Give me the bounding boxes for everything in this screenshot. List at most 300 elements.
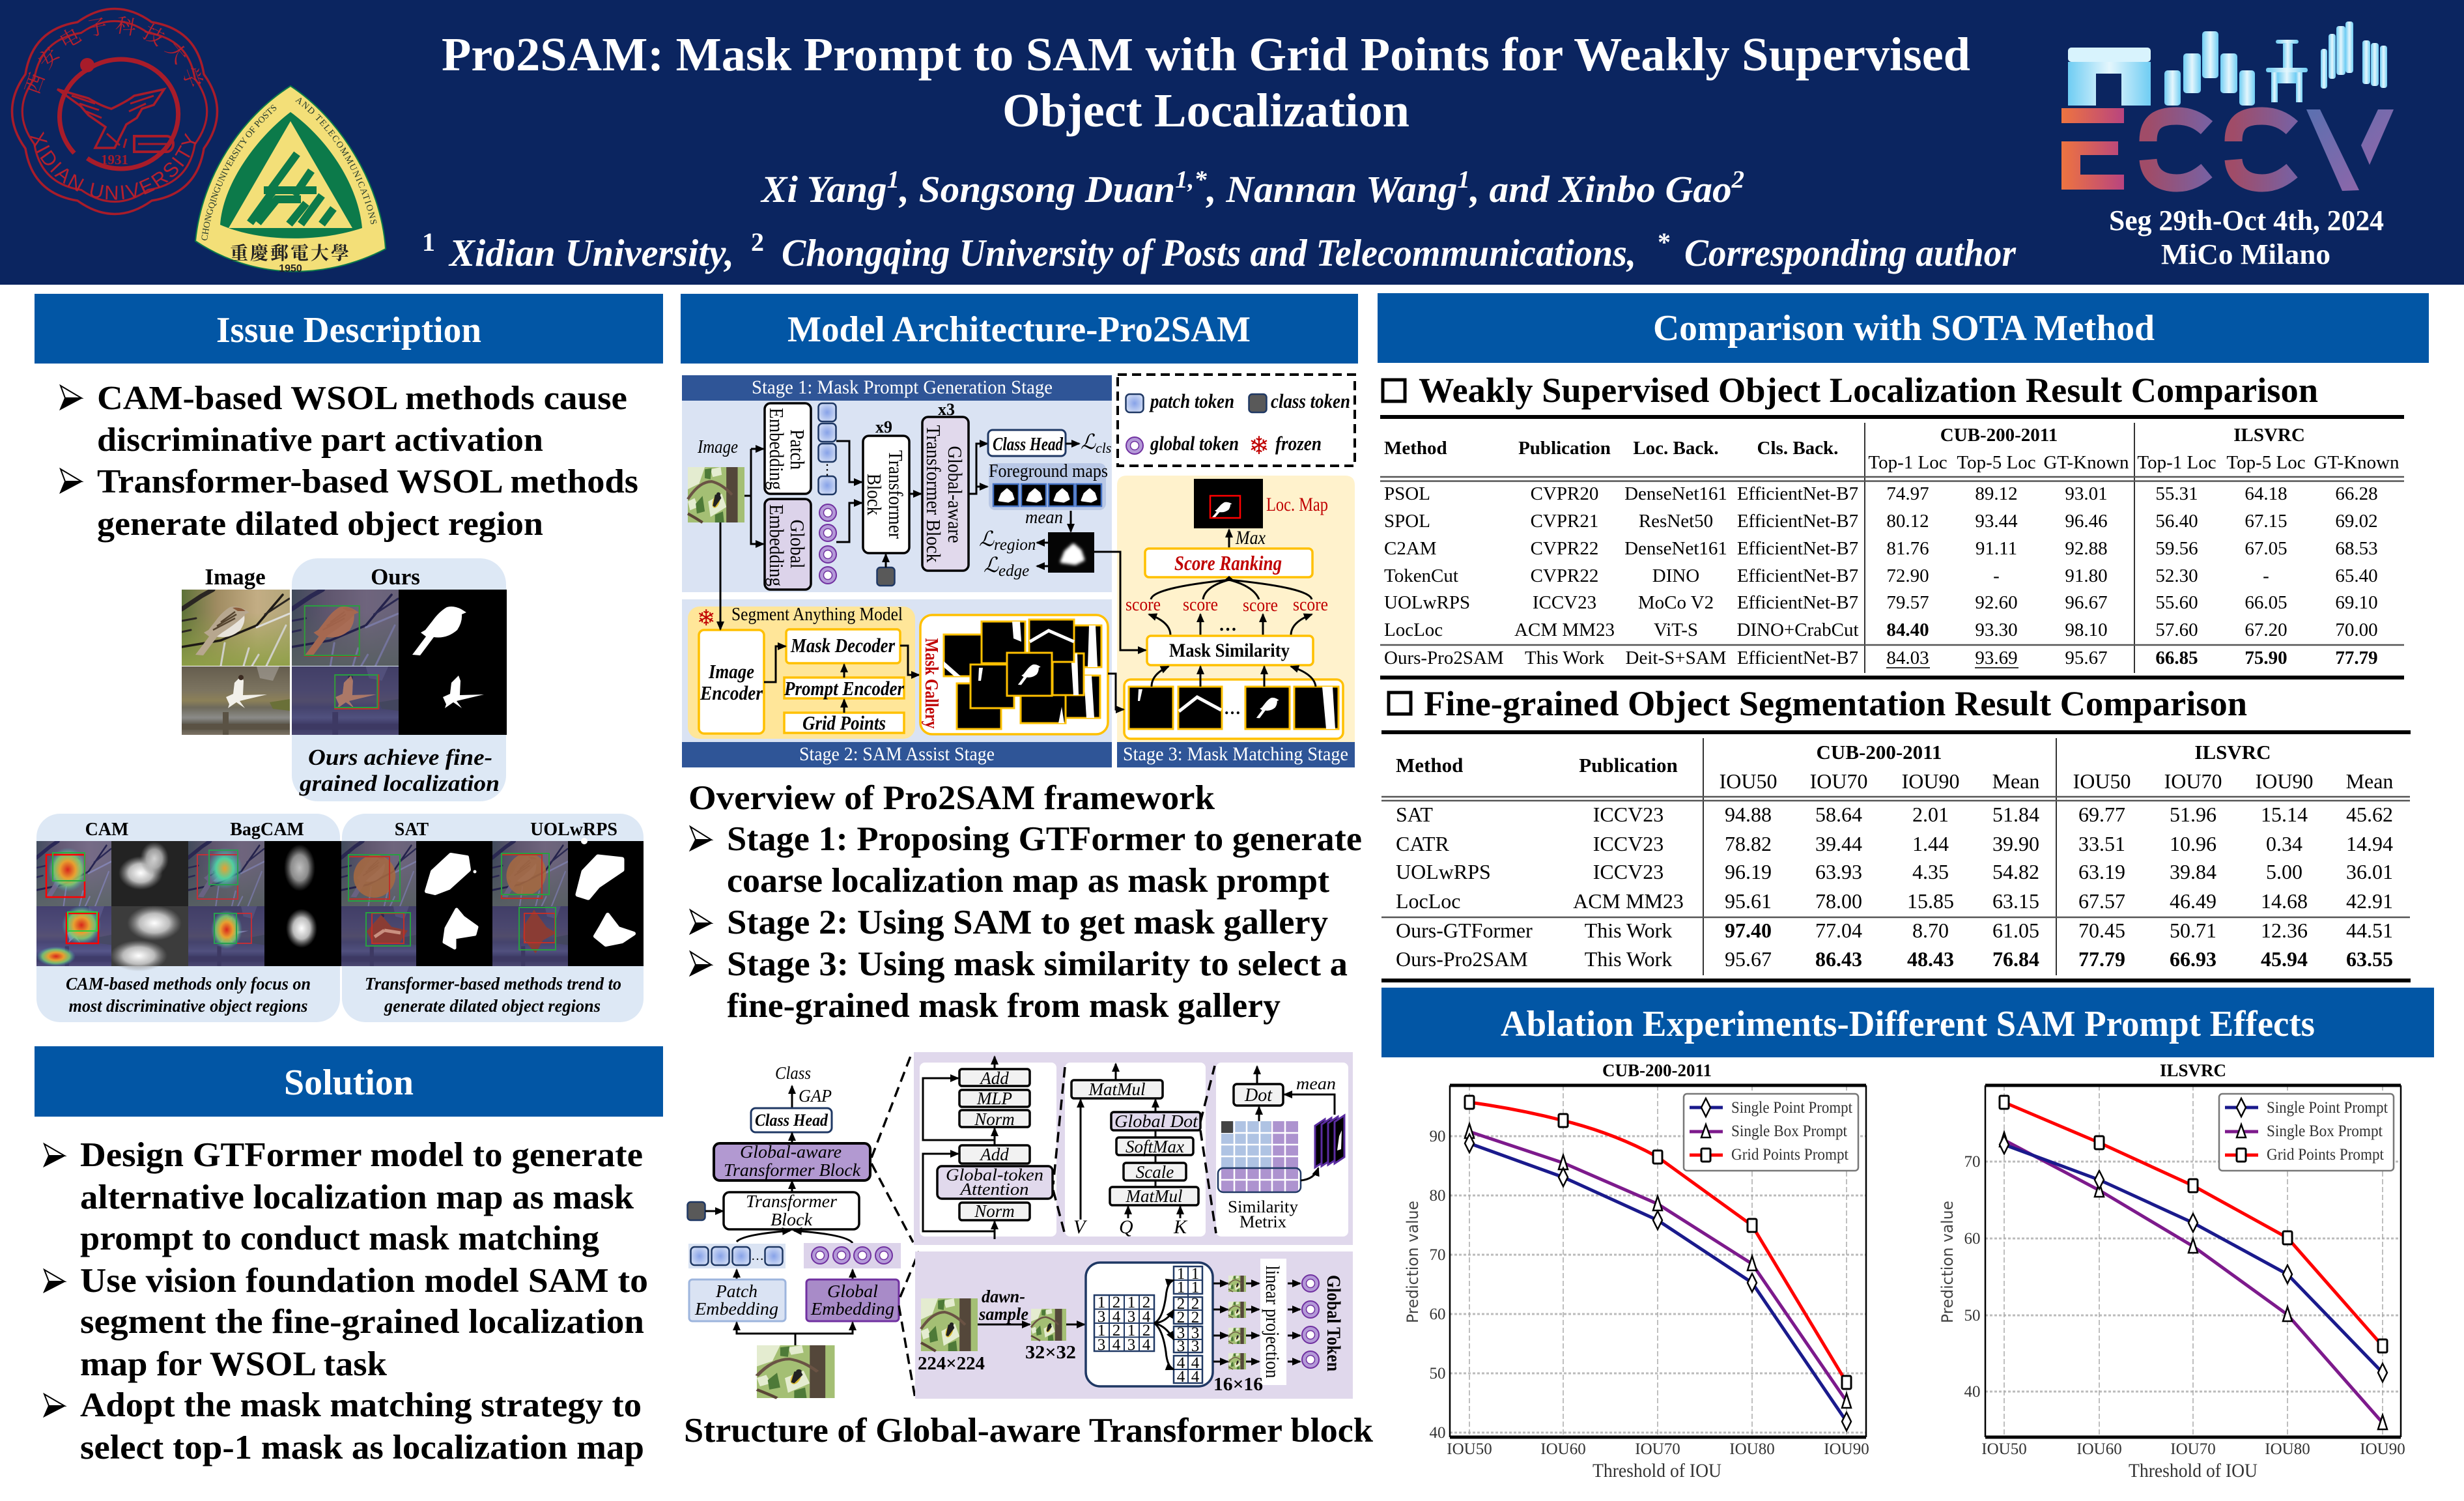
table: segmentation results: 86.43 bbox=[1815, 947, 1862, 971]
table: WSOL results: 66.05 bbox=[2245, 592, 2287, 613]
table: WSOL results: DINO bbox=[1652, 565, 1699, 586]
heading: issue description bbox=[35, 294, 663, 364]
table: WSOL results: 65.40 bbox=[2335, 565, 2378, 586]
table: WSOL results: CVPR21 bbox=[1531, 511, 1598, 532]
grid: 4×4 patches: 1 bbox=[1127, 1294, 1135, 1311]
chart legend: Single Point Prompt bbox=[1731, 1099, 1852, 1117]
chart: ILSVRC: IOU90 bbox=[2360, 1440, 2405, 1458]
diagram: stage 1 mask prompt generation: x3 bbox=[938, 400, 955, 419]
diagram: stage 1 mask prompt generation: Foreground maps bbox=[989, 461, 1108, 481]
figure: SAT and UOLwRPS comparison: generate dilated object regions bbox=[384, 996, 601, 1016]
table: WSOL results: 91.11 bbox=[1975, 538, 2017, 559]
table: segmentation results: 44.51 bbox=[2346, 919, 2393, 942]
figure: image vs ours: Image bbox=[205, 564, 266, 590]
table: segmentation results: IOU90 bbox=[1902, 769, 1959, 793]
bullet list: overview: Stage 2: Using SAM to get mask gallery bbox=[727, 904, 1328, 941]
table: WSOL results: 67.20 bbox=[2245, 620, 2287, 640]
table: segmentation results: SAT bbox=[1396, 803, 1433, 826]
block: transformer sub-layers bbox=[923, 1057, 1053, 1239]
heading: solution bbox=[35, 1046, 663, 1117]
title: Object Localization bbox=[1002, 84, 1409, 137]
chart: CUB-200-2011: Prediction value bbox=[1404, 1201, 1422, 1323]
table: segmentation results: ACM MM23 bbox=[1573, 889, 1684, 913]
grids: grouped 2×2 patches: 1 bbox=[1191, 1279, 1199, 1296]
table: segmentation results: 54.82 bbox=[1992, 860, 2039, 883]
table: segmentation results: 14.68 bbox=[2261, 889, 2308, 913]
diagram: GTFormer overview stack: Block bbox=[771, 1210, 813, 1229]
table: segmentation results: 94.88 bbox=[1725, 803, 1772, 826]
diagram: GTFormer overview stack: … bbox=[751, 1249, 764, 1263]
table: WSOL results: MoCo V2 bbox=[1638, 592, 1714, 613]
diagram: GTFormer overview stack: Patch bbox=[715, 1281, 758, 1301]
legend: token types: frozen bbox=[1275, 432, 1322, 455]
table: segmentation results: UOLwRPS bbox=[1396, 860, 1491, 883]
diagram: stage 1 mask prompt generation: Class Head bbox=[993, 435, 1064, 455]
diagram: stage 1 mask prompt generation: ℒ bbox=[1081, 430, 1096, 453]
diagram: GTFormer overview stack: Global bbox=[827, 1281, 878, 1301]
figure: SAT and UOLwRPS comparison: SAT bbox=[395, 820, 429, 840]
diagram: stage 1 mask prompt generation: Global-aware bbox=[944, 446, 967, 543]
table: WSOL results: CVPR20 bbox=[1531, 483, 1598, 504]
table: WSOL results: ILSVRC bbox=[2233, 425, 2305, 446]
table: WSOL results: 93.01 bbox=[2065, 483, 2108, 504]
bullet list: overview bbox=[690, 820, 1362, 1025]
diagram: stage 2 SAM assist: Image bbox=[708, 660, 754, 683]
table: WSOL results: - bbox=[1993, 565, 2000, 586]
table: WSOL results: 84.40 bbox=[1886, 620, 1929, 640]
table: WSOL results: 70.00 bbox=[2335, 620, 2378, 640]
table: segmentation results: 51.96 bbox=[2170, 803, 2216, 826]
table: WSOL results: 67.15 bbox=[2245, 511, 2287, 532]
affiliations: Xidian University, bbox=[448, 231, 734, 274]
table: WSOL results: 52.30 bbox=[2155, 565, 2198, 586]
table: segmentation results: 63.15 bbox=[1992, 889, 2039, 913]
table: segmentation results: 66.93 bbox=[2170, 947, 2216, 971]
authors: 1 bbox=[887, 166, 899, 193]
chart: ILSVRC: 70 bbox=[1964, 1153, 1980, 1171]
legend: token types bbox=[1118, 375, 1355, 466]
table: segmentation results: This Work bbox=[1585, 947, 1672, 971]
diagram: stage 1 mask prompt generation: Embedding bbox=[765, 504, 788, 586]
diagram: stage 2 SAM assist: Segment Anything Model bbox=[731, 604, 903, 625]
block: similarity matrix: mean bbox=[1296, 1074, 1336, 1093]
chart legend: Single Point Prompt bbox=[2267, 1099, 2388, 1117]
table: WSOL results: TokenCut bbox=[1384, 565, 1458, 586]
chart: ILSVRC: Prediction value bbox=[1938, 1201, 1957, 1323]
table: segmentation results: 8.70 bbox=[1912, 919, 1949, 942]
diagram: global embedding detail: 224×224 bbox=[918, 1354, 985, 1374]
table: segmentation results: 50.71 bbox=[2170, 919, 2216, 942]
diagram: stage 1 mask prompt generation: Embedding bbox=[765, 408, 788, 490]
logo: Chongqing University of Posts and Telecommunications: CHONGQINGUNIVERSITY OF POSTS bbox=[202, 104, 276, 240]
table: segmentation results: Ours-Pro2SAM bbox=[1396, 947, 1528, 971]
bullet list: issues: CAM-based WSOL methods cause bbox=[97, 380, 627, 417]
table: WSOL results: 93.44 bbox=[1975, 511, 2018, 532]
table: WSOL results: LocLoc bbox=[1384, 620, 1443, 640]
diagram: stage 2 SAM assist: Grid Points bbox=[802, 711, 886, 734]
diagram: stage 1 mask prompt generation: Transformer Block bbox=[922, 425, 945, 563]
panel: comparison with SOTA bbox=[1378, 293, 2429, 982]
chart: CUB-200-2011 bbox=[1404, 1061, 1869, 1481]
table: WSOL results: 55.31 bbox=[2155, 483, 2198, 504]
table: segmentation results: 39.44 bbox=[1815, 832, 1862, 855]
block: transformer sub-layers: Attention bbox=[959, 1180, 1029, 1199]
table: WSOL results: C2AM bbox=[1384, 538, 1437, 559]
chart: ILSVRC: Threshold of IOU bbox=[2129, 1460, 2258, 1481]
table: WSOL results: 93.30 bbox=[1975, 620, 2018, 640]
bullet list: solution bbox=[44, 1136, 648, 1466]
diagram: global embedding detail: dawn- bbox=[982, 1287, 1025, 1306]
diagram: GTFormer overview stack: Transformer bbox=[746, 1192, 838, 1211]
logo: Xidian University seal: XIDIAN UNIVERSITY bbox=[30, 132, 197, 200]
grid: 4×4 patches: 4 bbox=[1112, 1336, 1121, 1354]
chart: CUB-200-2011: IOU80 bbox=[1729, 1440, 1775, 1458]
table: segmentation results: 77.79 bbox=[2078, 947, 2125, 971]
table: WSOL results: 75.90 bbox=[2245, 648, 2287, 668]
table: segmentation results: ILSVRC bbox=[2194, 741, 2271, 764]
table: segmentation results: 76.84 bbox=[1992, 947, 2039, 971]
series: single point prompt bbox=[1465, 1134, 1851, 1431]
diagram: stage 3 mask matching: score bbox=[1183, 594, 1218, 615]
logo: Xidian University seal bbox=[10, 8, 219, 215]
table: WSOL results: 91.80 bbox=[2065, 565, 2108, 586]
table: segmentation results: This Work bbox=[1585, 919, 1672, 942]
chart legend bbox=[2219, 1094, 2394, 1171]
chart: ILSVRC: IOU70 bbox=[2170, 1440, 2216, 1458]
diagram: stage 3 mask matching: Loc. Map bbox=[1266, 494, 1328, 515]
chart: CUB-200-2011: IOU50 bbox=[1447, 1440, 1492, 1458]
table: segmentation results: 45.94 bbox=[2261, 947, 2308, 971]
table: segmentation results: ICCV23 bbox=[1593, 860, 1664, 883]
legend: token types: ❄ bbox=[1249, 431, 1269, 460]
table: WSOL results: Top-1 Loc bbox=[1868, 452, 1947, 473]
diagram: stage 3 mask matching: score bbox=[1243, 595, 1278, 616]
authors: , Songsong Duan bbox=[898, 168, 1175, 210]
caption: structure of global-aware transformer block: Structure of Global-aware Transformer block bbox=[684, 1412, 1374, 1450]
grid: 4×4 patches: 3 bbox=[1097, 1336, 1105, 1354]
table: WSOL results: GT-Known bbox=[2043, 452, 2129, 473]
table: segmentation results: LocLoc bbox=[1396, 889, 1460, 913]
table: WSOL results: ACM MM23 bbox=[1514, 620, 1615, 640]
figure: SAT and UOLwRPS comparison: UOLwRPS bbox=[530, 820, 617, 840]
table: segmentation results: 46.49 bbox=[2170, 889, 2216, 913]
table: segmentation results: 15.85 bbox=[1907, 889, 1954, 913]
table: segmentation results bbox=[1381, 730, 2411, 982]
table: WSOL results: Deit-S+SAM bbox=[1626, 648, 1726, 668]
diagram: stage 3 mask matching: score bbox=[1126, 594, 1161, 615]
diagram: stage 2 SAM assist: Encoder bbox=[700, 681, 763, 704]
chart: CUB-200-2011: IOU70 bbox=[1635, 1440, 1680, 1458]
table: segmentation results: 48.43 bbox=[1907, 947, 1954, 971]
table: WSOL results: CUB-200-2011 bbox=[1940, 425, 2058, 446]
grids: grouped 2×2 patches: 1 bbox=[1177, 1279, 1185, 1296]
table: WSOL results: Cls. Back. bbox=[1757, 438, 1838, 459]
table: segmentation results: 58.64 bbox=[1815, 803, 1862, 826]
diagram: stage 1 mask prompt generation: Global bbox=[786, 520, 809, 568]
table: WSOL results: CVPR22 bbox=[1531, 538, 1598, 559]
figure: CAM and BagCAM comparison: CAM bbox=[85, 820, 128, 840]
table: WSOL results: 74.97 bbox=[1886, 483, 1929, 504]
grid: 4×4 patches: 4 bbox=[1142, 1308, 1151, 1326]
bullet list: solution: segment the fine-grained localization bbox=[80, 1303, 644, 1341]
chart: CUB-200-2011: CUB-200-2011 bbox=[1602, 1061, 1712, 1080]
series: single box prompt bbox=[2000, 1132, 2387, 1429]
series: grid points prompt bbox=[2000, 1096, 2387, 1352]
grids: grouped 2×2 patches: 4 bbox=[1177, 1368, 1185, 1386]
table: WSOL results: SPOL bbox=[1384, 511, 1430, 532]
table: segmentation results: 2.01 bbox=[1912, 803, 1949, 826]
table: segmentation results: IOU90 bbox=[2256, 769, 2313, 793]
legend: token types: global token bbox=[1150, 432, 1239, 455]
bullet list: solution: map for WSOL task bbox=[80, 1345, 388, 1383]
block: transformer sub-layers: MLP bbox=[976, 1089, 1012, 1108]
chart: CUB-200-2011: 80 bbox=[1429, 1187, 1446, 1205]
grids: grouped 2×2 patches: 3 bbox=[1191, 1324, 1199, 1342]
affiliations bbox=[422, 227, 2017, 274]
table: segmentation results: 78.00 bbox=[1815, 889, 1862, 913]
chart legend: Single Box Prompt bbox=[2267, 1122, 2383, 1140]
table: WSOL results: 98.10 bbox=[2065, 620, 2108, 640]
grids: grouped 2×2 patches: 3 bbox=[1177, 1337, 1185, 1355]
chart: CUB-200-2011: 90 bbox=[1429, 1128, 1446, 1145]
bullet list: solution: prompt to conduct mask matching bbox=[80, 1220, 599, 1257]
authors: 1,* bbox=[1175, 166, 1208, 193]
heading: issue description: Issue Description bbox=[216, 310, 481, 350]
logo: Chongqing University of Posts and Telecommunications: 重慶郵電大學 bbox=[230, 243, 351, 264]
grids: grouped 2×2 patches bbox=[1174, 1265, 1202, 1386]
table: segmentation results: 63.93 bbox=[1815, 860, 1862, 883]
table: WSOL results: - bbox=[2263, 565, 2269, 586]
table: segmentation results: Publication bbox=[1579, 754, 1678, 777]
table: WSOL results: EfficientNet-B7 bbox=[1737, 483, 1858, 504]
diagram: global embedding detail: linear projection bbox=[1262, 1265, 1283, 1379]
diagram: GTFormer overview stack: Embedding bbox=[810, 1299, 894, 1319]
grids: grouped 2×2 patches: 3 bbox=[1191, 1337, 1199, 1355]
grid: 4×4 patches: 2 bbox=[1142, 1322, 1150, 1339]
table: WSOL results: 64.18 bbox=[2245, 483, 2287, 504]
series: grid points prompt bbox=[1465, 1096, 1851, 1389]
heading: comparison with SOTA: Comparison with SOTA Method bbox=[1653, 308, 2155, 349]
grid: 4×4 patches: 2 bbox=[1112, 1294, 1120, 1311]
panel: ablation experiments bbox=[1381, 988, 2434, 1481]
block: global dot attention: K bbox=[1173, 1216, 1188, 1238]
table: segmentation results: Ours-GTFormer bbox=[1396, 919, 1533, 942]
authors: , and Xinbo Gao bbox=[1469, 168, 1732, 210]
diagram: GTFormer overview stack: Global-aware bbox=[740, 1142, 842, 1162]
table: WSOL results: Method bbox=[1384, 438, 1447, 459]
table: segmentation results: 14.94 bbox=[2346, 832, 2393, 855]
affiliations: Corresponding author bbox=[1684, 231, 2017, 274]
chart: CUB-200-2011: 40 bbox=[1429, 1424, 1446, 1442]
logo: ECCV Milano skyline bbox=[2061, 21, 2394, 191]
bullet list: solution: Use vision foundation model SAM to bbox=[80, 1262, 648, 1300]
figure: image vs ours: Ours bbox=[371, 564, 420, 590]
heading: model architecture bbox=[681, 294, 1358, 364]
diagram: global embedding detail: sample bbox=[978, 1304, 1028, 1324]
diagram: stage 1 mask prompt generation: ⋮ bbox=[820, 461, 834, 478]
title: Pro2SAM: Mask Prompt to SAM with Grid Points for Weakly Supervised bbox=[442, 28, 1970, 81]
block: transformer sub-layers: Global-token bbox=[946, 1165, 1043, 1184]
authors: 2 bbox=[1731, 166, 1744, 193]
table: segmentation results: Mean bbox=[1992, 769, 2039, 793]
legend: token types: patch token bbox=[1148, 390, 1234, 412]
heading: comparison with SOTA bbox=[1378, 293, 2429, 363]
diagram: stage 2 SAM assist: Prompt Encoder bbox=[784, 677, 905, 700]
chart: ILSVRC: 40 bbox=[1964, 1383, 1980, 1401]
bullet list: overview: fine-grained mask from mask gallery bbox=[727, 987, 1281, 1025]
block: similarity matrix: Similarity bbox=[1228, 1197, 1298, 1216]
table: WSOL results: UOLwRPS bbox=[1384, 592, 1470, 613]
block: global dot attention: MatMul bbox=[1126, 1186, 1183, 1206]
grids: grouped 2×2 patches: 1 bbox=[1177, 1265, 1185, 1283]
bullet list: issues: Transformer-based WSOL methods bbox=[97, 463, 638, 500]
grid: 4×4 patches: 3 bbox=[1127, 1308, 1135, 1326]
block: transformer sub-layers: Norm bbox=[974, 1109, 1015, 1129]
diagram: stage 1 mask prompt generation: Image bbox=[697, 436, 738, 457]
table: WSOL results: 80.12 bbox=[1886, 511, 1929, 532]
conference date and venue bbox=[2109, 205, 2384, 270]
heading: solution: Solution bbox=[284, 1063, 414, 1103]
table: WSOL results: Ours-Pro2SAM bbox=[1384, 648, 1504, 668]
table: WSOL results: 92.60 bbox=[1975, 592, 2018, 613]
bullet list: overview: Stage 1: Proposing GTFormer to generate bbox=[727, 820, 1362, 858]
mask gallery: Mask Gallery bbox=[921, 638, 942, 729]
grids: grouped 2×2 patches: 2 bbox=[1191, 1309, 1199, 1326]
table: segmentation results: 4.35 bbox=[1912, 860, 1949, 883]
table: segmentation results: 39.90 bbox=[1992, 832, 2039, 855]
affiliations: 1 bbox=[422, 227, 435, 257]
table: segmentation results: 33.51 bbox=[2078, 832, 2125, 855]
table: WSOL results: 93.69 bbox=[1975, 648, 2018, 668]
table: WSOL results: EfficientNet-B7 bbox=[1737, 592, 1858, 613]
chart legend: Single Box Prompt bbox=[1731, 1122, 1847, 1140]
heading: overview: Overview of Pro2SAM framework bbox=[688, 779, 1215, 817]
diagram: stage 1 mask prompt generation: edge bbox=[998, 562, 1029, 580]
table: segmentation results: Mean bbox=[2346, 769, 2393, 793]
grid: 4×4 patches: 3 bbox=[1127, 1336, 1135, 1354]
table: segmentation results: 63.55 bbox=[2346, 947, 2393, 971]
table: WSOL results: EfficientNet-B7 bbox=[1737, 538, 1858, 559]
table: segmentation results: 45.62 bbox=[2346, 803, 2393, 826]
table: segmentation results: 96.19 bbox=[1725, 860, 1772, 883]
diagram: stage 1 mask prompt generation: mean bbox=[1025, 507, 1063, 528]
table: segmentation results: ICCV23 bbox=[1593, 832, 1664, 855]
table: segmentation results: 78.82 bbox=[1725, 832, 1772, 855]
diagram: stage 1 mask prompt generation: ℒ bbox=[984, 553, 998, 577]
table: segmentation results: 5.00 bbox=[2266, 860, 2302, 883]
logo: Chongqing University of Posts and Telecommunications: 1950 bbox=[279, 263, 302, 274]
table: segmentation results: IOU50 bbox=[1720, 769, 1777, 793]
table: segmentation results: CUB-200-2011 bbox=[1817, 741, 1942, 764]
diagram: stage 3 mask matching: Mask Similarity bbox=[1169, 640, 1290, 661]
grids: grouped 2×2 patches: 2 bbox=[1177, 1295, 1185, 1313]
diagram: stage 3 mask matching: … bbox=[1219, 615, 1237, 635]
diagram: stage 2 SAM assist: Stage 2: SAM Assist Stage bbox=[799, 743, 995, 765]
affiliations: 2 bbox=[751, 227, 764, 257]
table: segmentation results: 63.19 bbox=[2078, 860, 2125, 883]
table: WSOL results: EfficientNet-B7 bbox=[1737, 565, 1858, 586]
table: segmentation results: CATR bbox=[1396, 832, 1449, 855]
grids: grouped 2×2 patches: 4 bbox=[1191, 1368, 1200, 1386]
table: WSOL results: 59.56 bbox=[2155, 538, 2198, 559]
table: segmentation results: 15.14 bbox=[2261, 803, 2308, 826]
diagram: global embedding detail: 16×16 bbox=[1213, 1375, 1263, 1395]
block: global dot attention: Q bbox=[1119, 1216, 1133, 1238]
chart: CUB-200-2011: 50 bbox=[1429, 1365, 1446, 1382]
diagram: stage 2 SAM assist: Mask Decoder bbox=[790, 634, 896, 657]
grid: 4×4 patches: 2 bbox=[1112, 1322, 1120, 1339]
table: WSOL results: 69.10 bbox=[2335, 592, 2378, 613]
chart: CUB-200-2011: 70 bbox=[1429, 1246, 1446, 1264]
chart: ILSVRC bbox=[1938, 1061, 2405, 1481]
table: WSOL results: This Work bbox=[1525, 648, 1604, 668]
grid: 4×4 patches: 1 bbox=[1127, 1322, 1135, 1339]
table: segmentation results: 39.84 bbox=[2170, 860, 2216, 883]
block: transformer sub-layers: Norm bbox=[974, 1201, 1015, 1221]
block: transformer sub-layers: Add bbox=[979, 1068, 1009, 1088]
table: WSOL results: 72.90 bbox=[1886, 565, 1929, 586]
table: WSOL results: 66.28 bbox=[2335, 483, 2378, 504]
grid: 4×4 patches: 1 bbox=[1097, 1294, 1105, 1311]
figure: CAM and BagCAM comparison: BagCAM bbox=[230, 820, 304, 840]
heading: ablation experiments: Ablation Experiments-Different SAM Prompt Effects bbox=[1501, 1004, 2315, 1044]
table: WSOL results: Top-5 Loc bbox=[1957, 452, 2036, 473]
authors: Xi Yang bbox=[761, 168, 885, 210]
chart legend: Grid Points Prompt bbox=[1731, 1146, 1848, 1164]
table: WSOL results: ViT-S bbox=[1654, 620, 1698, 640]
table: segmentation results: 12.36 bbox=[2261, 919, 2308, 942]
diagram: GTFormer overview stack bbox=[688, 1053, 919, 1398]
table: WSOL results: CVPR22 bbox=[1531, 565, 1598, 586]
table: WSOL results: 79.57 bbox=[1886, 592, 1929, 613]
bullet list: solution: alternative localization map as mask bbox=[80, 1179, 634, 1216]
diagram: GTFormer overview stack: GAP bbox=[799, 1086, 832, 1106]
chart: CUB-200-2011: IOU90 bbox=[1824, 1440, 1869, 1458]
diagram: stage 3 mask matching: … bbox=[1224, 699, 1241, 718]
bullet list: overview: Stage 3: Using mask similarity to select a bbox=[727, 945, 1348, 983]
chart: ILSVRC: 60 bbox=[1964, 1230, 1980, 1248]
bullet list: solution: Design GTFormer model to generate bbox=[80, 1136, 643, 1174]
chart: ILSVRC: ILSVRC bbox=[2160, 1061, 2226, 1080]
table: WSOL results: ICCV23 bbox=[1533, 592, 1596, 613]
table: segmentation results: IOU70 bbox=[2164, 769, 2222, 793]
chart: ILSVRC: IOU50 bbox=[1981, 1440, 2027, 1458]
diagram: GTFormer overview stack: Class Head bbox=[755, 1111, 828, 1130]
table: segmentation results: 95.61 bbox=[1725, 889, 1772, 913]
legend: token types: class token bbox=[1271, 390, 1350, 412]
logo: Chongqing University of Posts and Telecommunications: AND TELECOMMUNICATIONS bbox=[295, 98, 376, 224]
authors: 1 bbox=[1458, 166, 1470, 193]
diagram: stage 1 mask prompt generation: ℒ bbox=[979, 527, 994, 550]
panel: issue description bbox=[35, 294, 663, 1022]
figure: image vs ours bbox=[182, 558, 507, 801]
grid: 4×4 patches: 4 bbox=[1112, 1308, 1121, 1326]
block: similarity matrix: Metrix bbox=[1239, 1212, 1286, 1231]
table: WSOL results: 92.88 bbox=[2065, 538, 2108, 559]
authors: , Nannan Wang bbox=[1206, 168, 1458, 210]
table: WSOL results: 57.60 bbox=[2155, 620, 2198, 640]
bullet list: solution: select top-1 mask as localization map bbox=[80, 1429, 644, 1466]
table: WSOL results: 89.12 bbox=[1975, 483, 2018, 504]
diagram: stage 1 mask prompt generation: Patch bbox=[786, 429, 809, 470]
diagram: global embedding detail: Global Token bbox=[1323, 1275, 1344, 1371]
diagram: stage 1 mask prompt generation: Stage 1: Mask Prompt Generation Stage bbox=[752, 377, 1053, 398]
chart: CUB-200-2011: IOU60 bbox=[1540, 1440, 1586, 1458]
figure: image vs ours: grained localization bbox=[299, 771, 500, 796]
panel: solution bbox=[35, 1046, 663, 1466]
table: WSOL results: 66.85 bbox=[2155, 648, 2198, 668]
affiliations: * bbox=[1658, 227, 1671, 257]
